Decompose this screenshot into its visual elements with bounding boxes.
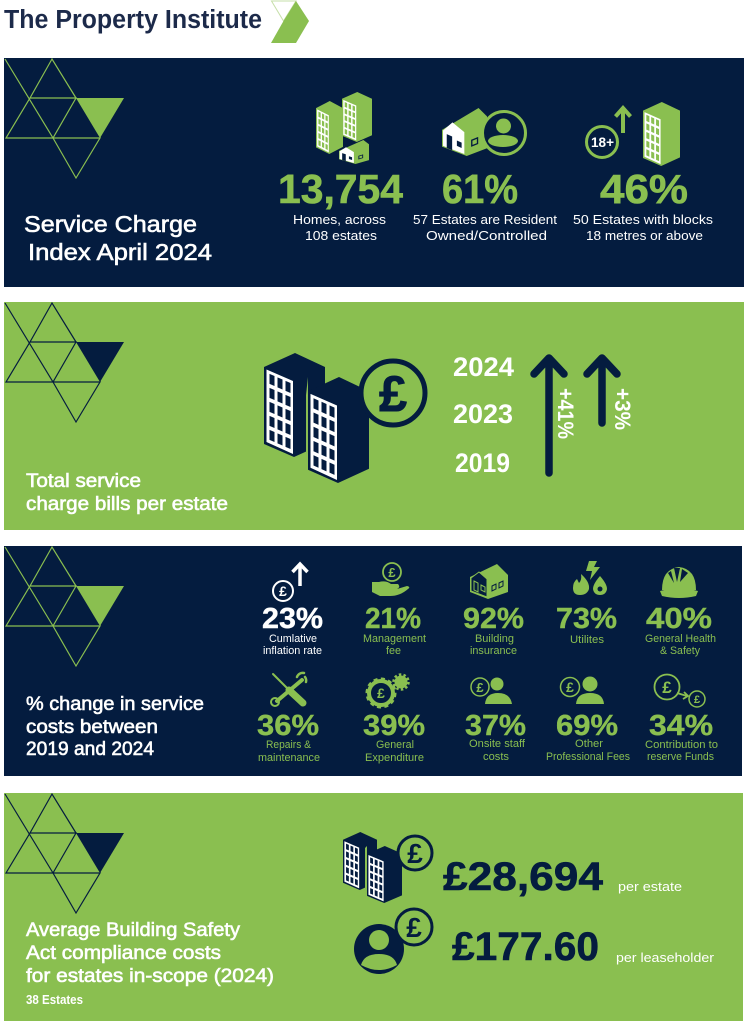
stat: general expenditure: 39% — [363, 710, 425, 742]
icon: tools — [271, 673, 306, 706]
stat: tall blocks — [573, 166, 714, 243]
icon: 18 plus with tower — [586, 102, 680, 166]
stat: resident owned: 61% — [442, 166, 518, 212]
stat: inflation — [262, 603, 323, 657]
panel: building safety act costs — [4, 793, 743, 1021]
icon: inflation — [273, 564, 308, 601]
panel title: 2019 and 2024 — [26, 738, 154, 760]
icon: utilities — [573, 561, 607, 595]
icon: house with resident — [442, 108, 526, 156]
stat: tall blocks: 18 metres or above — [586, 228, 703, 243]
stat: inflation: 23% — [262, 603, 323, 635]
stat: utilities: 73% — [556, 603, 617, 635]
icon: towers with pound coin: £ — [407, 838, 423, 869]
icon: hard hat — [660, 567, 698, 598]
arrow: plus 3 percent — [587, 358, 635, 430]
triangle motif — [5, 794, 124, 913]
icon: management hand: £ — [388, 565, 396, 580]
icon: professional fees — [560, 676, 604, 704]
year labels: 2024 — [453, 352, 514, 382]
icon: towers with pound coin — [343, 832, 432, 903]
stat: reserve funds: reserve Funds — [647, 751, 714, 763]
stat: onsite staff: 37% — [465, 710, 526, 742]
stat: building insurance: Building — [475, 633, 514, 645]
stat: onsite staff: costs — [483, 751, 509, 763]
arrow: plus 41 percent — [534, 358, 578, 473]
estate count: 38 Estates — [26, 992, 83, 1007]
stat: cost per estate: £28,694 — [443, 855, 604, 899]
icon: inflation: £ — [279, 583, 287, 599]
icon: towers with pound coin: £ — [379, 366, 407, 422]
panel title: Average Building Safety — [26, 919, 240, 941]
panel title: costs between — [26, 716, 158, 738]
stat: management fee — [363, 603, 426, 657]
panel title: charge bills per estate — [26, 493, 228, 515]
panel title: % change in service — [26, 693, 204, 715]
stat: inflation: inflation rate — [263, 645, 322, 657]
panel: percent change in service costs — [4, 546, 742, 776]
stat: onsite staff: Onsite staff — [469, 738, 526, 750]
stat: onsite staff — [465, 710, 526, 763]
stat: repairs — [257, 710, 320, 764]
stat: tall blocks: 50 Estates with blocks — [573, 212, 714, 227]
stat: management fee: 21% — [365, 603, 421, 635]
stat: professional fees: 69% — [556, 710, 618, 742]
stat: resident owned — [413, 166, 557, 243]
header logo — [4, 1, 309, 43]
stat: homes — [278, 166, 403, 243]
stat: health and safety: General Health — [645, 633, 716, 645]
stat: general expenditure — [363, 710, 425, 764]
icon: professional fees: £ — [566, 679, 574, 695]
stat: inflation: Cumlative — [269, 633, 317, 645]
stat: cost per leaseholder: per leaseholder — [616, 950, 715, 965]
stat: professional fees: Professional Fees — [546, 751, 630, 763]
stat: cost per leaseholder — [452, 925, 715, 969]
year labels: 2023 — [453, 399, 513, 429]
stat: repairs: Repairs & — [266, 739, 312, 751]
panel title: Act compliance costs — [26, 942, 221, 964]
stat: repairs: maintenance — [258, 752, 320, 764]
icon: management hand — [372, 563, 409, 596]
year labels — [453, 352, 514, 478]
stat: health and safety: & Safety — [660, 645, 700, 657]
icon: reserve funds transfer: £ — [662, 678, 672, 697]
panel: total service charge bills — [4, 302, 744, 530]
icon: towers with pound coin — [264, 353, 425, 483]
icon: reserve funds transfer — [654, 674, 705, 707]
stat: reserve funds: 34% — [649, 710, 713, 742]
stat: management fee: fee — [386, 645, 401, 657]
stat: resident owned: 57 Estates are Resident — [413, 212, 557, 227]
stat: management fee: Management — [363, 633, 426, 645]
icon: leaseholder with pound coin: £ — [406, 912, 422, 943]
stat: tall blocks: 46% — [600, 166, 688, 212]
icon: onsite staff — [471, 678, 512, 704]
stat: professional fees: Other — [575, 738, 603, 750]
stat: building insurance: insurance — [470, 645, 517, 657]
organisation name: The Property Institute — [4, 6, 262, 34]
stat: general expenditure: General — [376, 739, 414, 751]
arrow: plus 3 percent: +3% — [610, 388, 635, 430]
panel: service charge index — [4, 58, 744, 287]
icon: 18 plus with tower: 18+ — [591, 134, 614, 150]
stat: utilities: Utilites — [570, 634, 605, 646]
stat: reserve funds — [645, 710, 718, 763]
stat: cost per estate: per estate — [618, 879, 682, 894]
triangle motif — [5, 547, 124, 666]
panel title: Total service — [26, 470, 141, 492]
stat: cost per estate — [443, 855, 682, 899]
panel title: Index April 2024 — [28, 239, 212, 265]
arrow: plus 41 percent: +41% — [553, 388, 578, 439]
stat: reserve funds: Contribution to — [645, 739, 718, 751]
stat: repairs: 36% — [257, 710, 319, 742]
stat: resident owned: Owned/Controlled — [426, 228, 547, 243]
panel title: Service Charge — [24, 211, 197, 237]
triangle motif — [5, 59, 124, 178]
icon: leaseholder with pound coin — [354, 909, 432, 974]
logo chevron — [271, 1, 309, 43]
icon: gears: £ — [377, 685, 385, 701]
triangle motif — [5, 303, 124, 422]
stat: general expenditure: Expenditure — [365, 752, 424, 764]
stat: homes: Homes, across — [293, 212, 387, 227]
panel title: for estates in-scope (2024) — [26, 965, 274, 987]
stat: cost per leaseholder: £177.60 — [452, 925, 599, 969]
stat: building insurance: 92% — [463, 603, 524, 635]
stat: health and safety — [645, 603, 716, 657]
stat: professional fees — [546, 710, 630, 763]
icon: gears — [367, 674, 408, 707]
stat: homes: 108 estates — [305, 228, 378, 243]
stat: building insurance — [463, 603, 524, 657]
icon: towers and house — [316, 92, 372, 164]
icon: reserve funds transfer: £ — [694, 694, 700, 706]
icon: insured house — [470, 564, 508, 599]
icon: onsite staff: £ — [476, 680, 484, 695]
stat: health and safety: 40% — [646, 603, 712, 635]
stat: homes: 13,754 — [278, 166, 403, 212]
year labels: 2019 — [455, 448, 510, 478]
